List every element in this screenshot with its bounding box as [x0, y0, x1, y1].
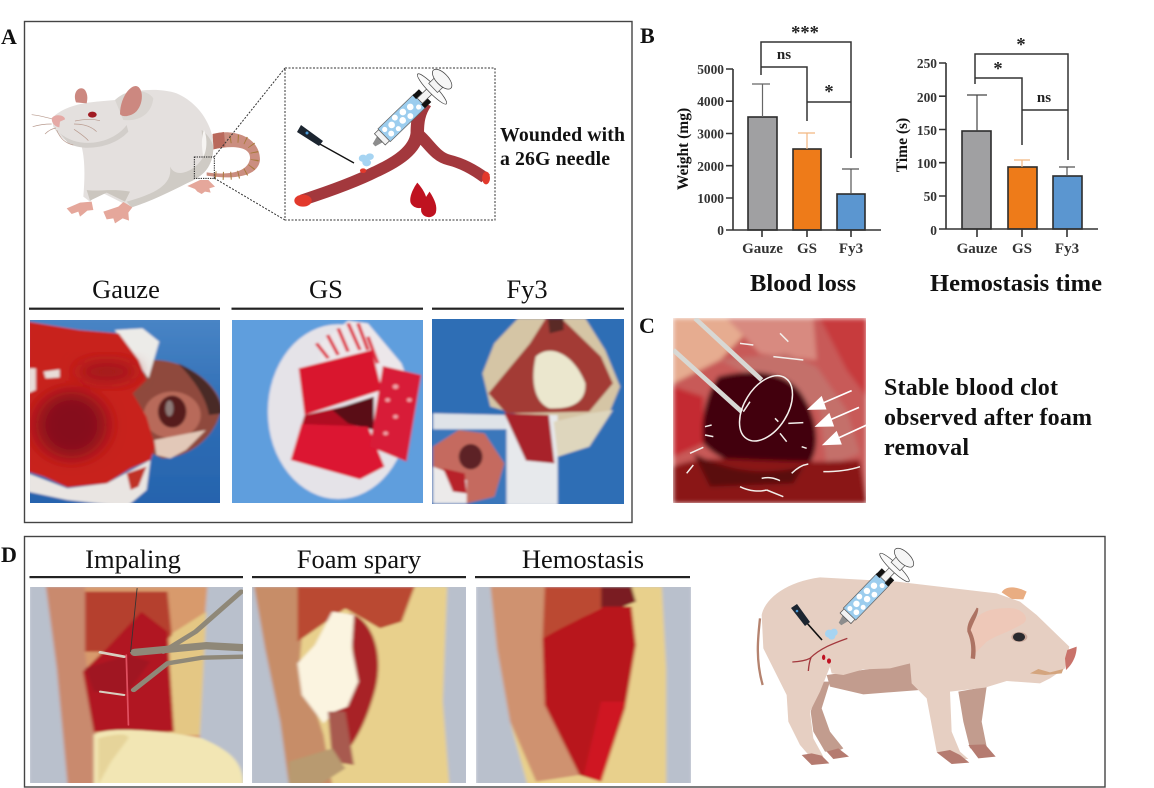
- y tick labels: 0: [930, 223, 937, 238]
- y tick labels: 0: [717, 223, 724, 238]
- heading: Fy3: Fy3: [506, 274, 548, 304]
- pig far hooves: [827, 744, 996, 759]
- bar chart: Blood loss: [675, 24, 881, 297]
- vessel on pig: [792, 638, 847, 671]
- foam puff on pig: [825, 629, 838, 640]
- tissue: [673, 318, 867, 503]
- zoom connector lines: [214, 68, 285, 220]
- x labels: Gauze: [957, 241, 998, 257]
- bars: [748, 117, 865, 230]
- rat whiskers: [32, 115, 100, 145]
- wound marker box: [194, 157, 214, 178]
- axes: [726, 69, 881, 237]
- vessel: [294, 103, 490, 217]
- forceps: [673, 318, 762, 412]
- heading: Gauze: Gauze: [92, 274, 160, 304]
- y tick labels: 1000: [697, 191, 724, 206]
- panel A label: A: [1, 24, 17, 49]
- rat body shade: [127, 130, 213, 207]
- y tick labels: 50: [924, 189, 937, 204]
- pig snout: [1065, 647, 1077, 670]
- y tick labels: 200: [917, 90, 937, 105]
- rat eye: [88, 112, 97, 118]
- pig ear: [971, 608, 1026, 653]
- photo: Impaling: [29, 585, 246, 785]
- significance brackets: *: [824, 83, 834, 103]
- significance brackets: ns: [1037, 90, 1051, 106]
- rat body: [52, 90, 213, 207]
- significance brackets: ***: [791, 24, 819, 44]
- pig near hooves: [802, 750, 969, 765]
- panel C caption: observed after foam: [884, 405, 1092, 431]
- significance brackets: *: [993, 60, 1003, 80]
- chart title: Hemostasis time: [930, 270, 1102, 297]
- panel C caption: removal: [884, 435, 969, 461]
- axes: [939, 63, 1098, 237]
- heading: Impaling: Impaling: [85, 544, 181, 574]
- panel D frame: [24, 536, 1105, 787]
- y tick labels: [917, 56, 937, 238]
- white arrows: [809, 391, 867, 444]
- panel D label: D: [1, 542, 17, 567]
- significance brackets: [975, 36, 1068, 160]
- x labels: Gauze: [742, 241, 783, 257]
- pig eye: [1011, 632, 1027, 642]
- needle tool: [297, 125, 354, 163]
- pig mouth: [1030, 669, 1063, 675]
- y tick labels: 2000: [697, 159, 724, 174]
- panel A frame: [24, 22, 632, 522]
- significance brackets: ns: [777, 47, 791, 63]
- highlighted ellipse: [738, 374, 794, 442]
- panel C label: C: [639, 313, 655, 338]
- panel C caption: [884, 375, 1092, 461]
- x labels: GS: [1012, 241, 1032, 257]
- photo: GS: [232, 320, 423, 503]
- foam puff: [359, 153, 374, 166]
- wound caption: Wounded with: [500, 124, 625, 146]
- syringe on pig: [825, 540, 923, 638]
- error bars: [967, 95, 1075, 176]
- chart title: Blood loss: [750, 270, 856, 297]
- rat near ear: [120, 86, 142, 116]
- y tick labels: [697, 62, 724, 238]
- forceps: [100, 588, 243, 725]
- illustration: pig: [758, 577, 1077, 765]
- x labels: Fy3: [1055, 241, 1079, 257]
- bars: [962, 131, 1082, 229]
- heading: GS: GS: [309, 274, 343, 304]
- photo: Foam spray: [250, 585, 469, 785]
- wound caption: a 26G needle: [500, 148, 610, 170]
- y tick labels: 4000: [697, 94, 724, 109]
- y tick labels: 100: [917, 156, 937, 171]
- inset: blood vessel wound: [285, 60, 495, 220]
- error bars: [752, 84, 859, 194]
- rat front paws: [67, 202, 132, 223]
- blood drops: [410, 183, 436, 217]
- significance brackets: *: [1016, 36, 1026, 56]
- rat nose: [52, 115, 65, 127]
- blood drops on pig: [822, 655, 831, 664]
- panel C caption: Stable blood clot: [884, 375, 1058, 401]
- significance brackets: [761, 24, 851, 158]
- rat far paw: [187, 180, 215, 194]
- photo: Fy3 with inset: [429, 313, 627, 507]
- photo: Gauze: [30, 320, 220, 503]
- syringe: [360, 60, 461, 160]
- y tick labels: 250: [917, 56, 937, 71]
- wound caption: [500, 124, 625, 170]
- photo: blood clot: [673, 318, 867, 503]
- illustration: white rat: [32, 86, 260, 223]
- y tick labels: 5000: [697, 62, 724, 77]
- pig tail: [758, 618, 763, 685]
- pig far ear: [1002, 587, 1027, 599]
- pig far legs and belly: [811, 663, 987, 752]
- rat far ear: [75, 88, 87, 103]
- photo: Hemostasis: [475, 585, 692, 785]
- y tick labels: 150: [917, 123, 937, 138]
- x labels: GS: [797, 241, 817, 257]
- needle tool on pig: [791, 604, 822, 640]
- y axis title: Weight (mg): [675, 108, 692, 190]
- pig body: [762, 577, 1069, 759]
- bar chart: Hemostasis time: [894, 36, 1102, 297]
- panel B label: B: [640, 23, 655, 48]
- x labels: Fy3: [839, 241, 863, 257]
- heading: Hemostasis: Hemostasis: [522, 544, 644, 574]
- y axis title: Time (s): [894, 118, 911, 172]
- y tick labels: 3000: [697, 126, 724, 142]
- rat tail: [207, 132, 260, 177]
- heading: Foam spary: Foam spary: [297, 544, 422, 574]
- speckle highlights: [687, 333, 860, 497]
- x labels: [957, 241, 1079, 257]
- x labels: [742, 241, 863, 257]
